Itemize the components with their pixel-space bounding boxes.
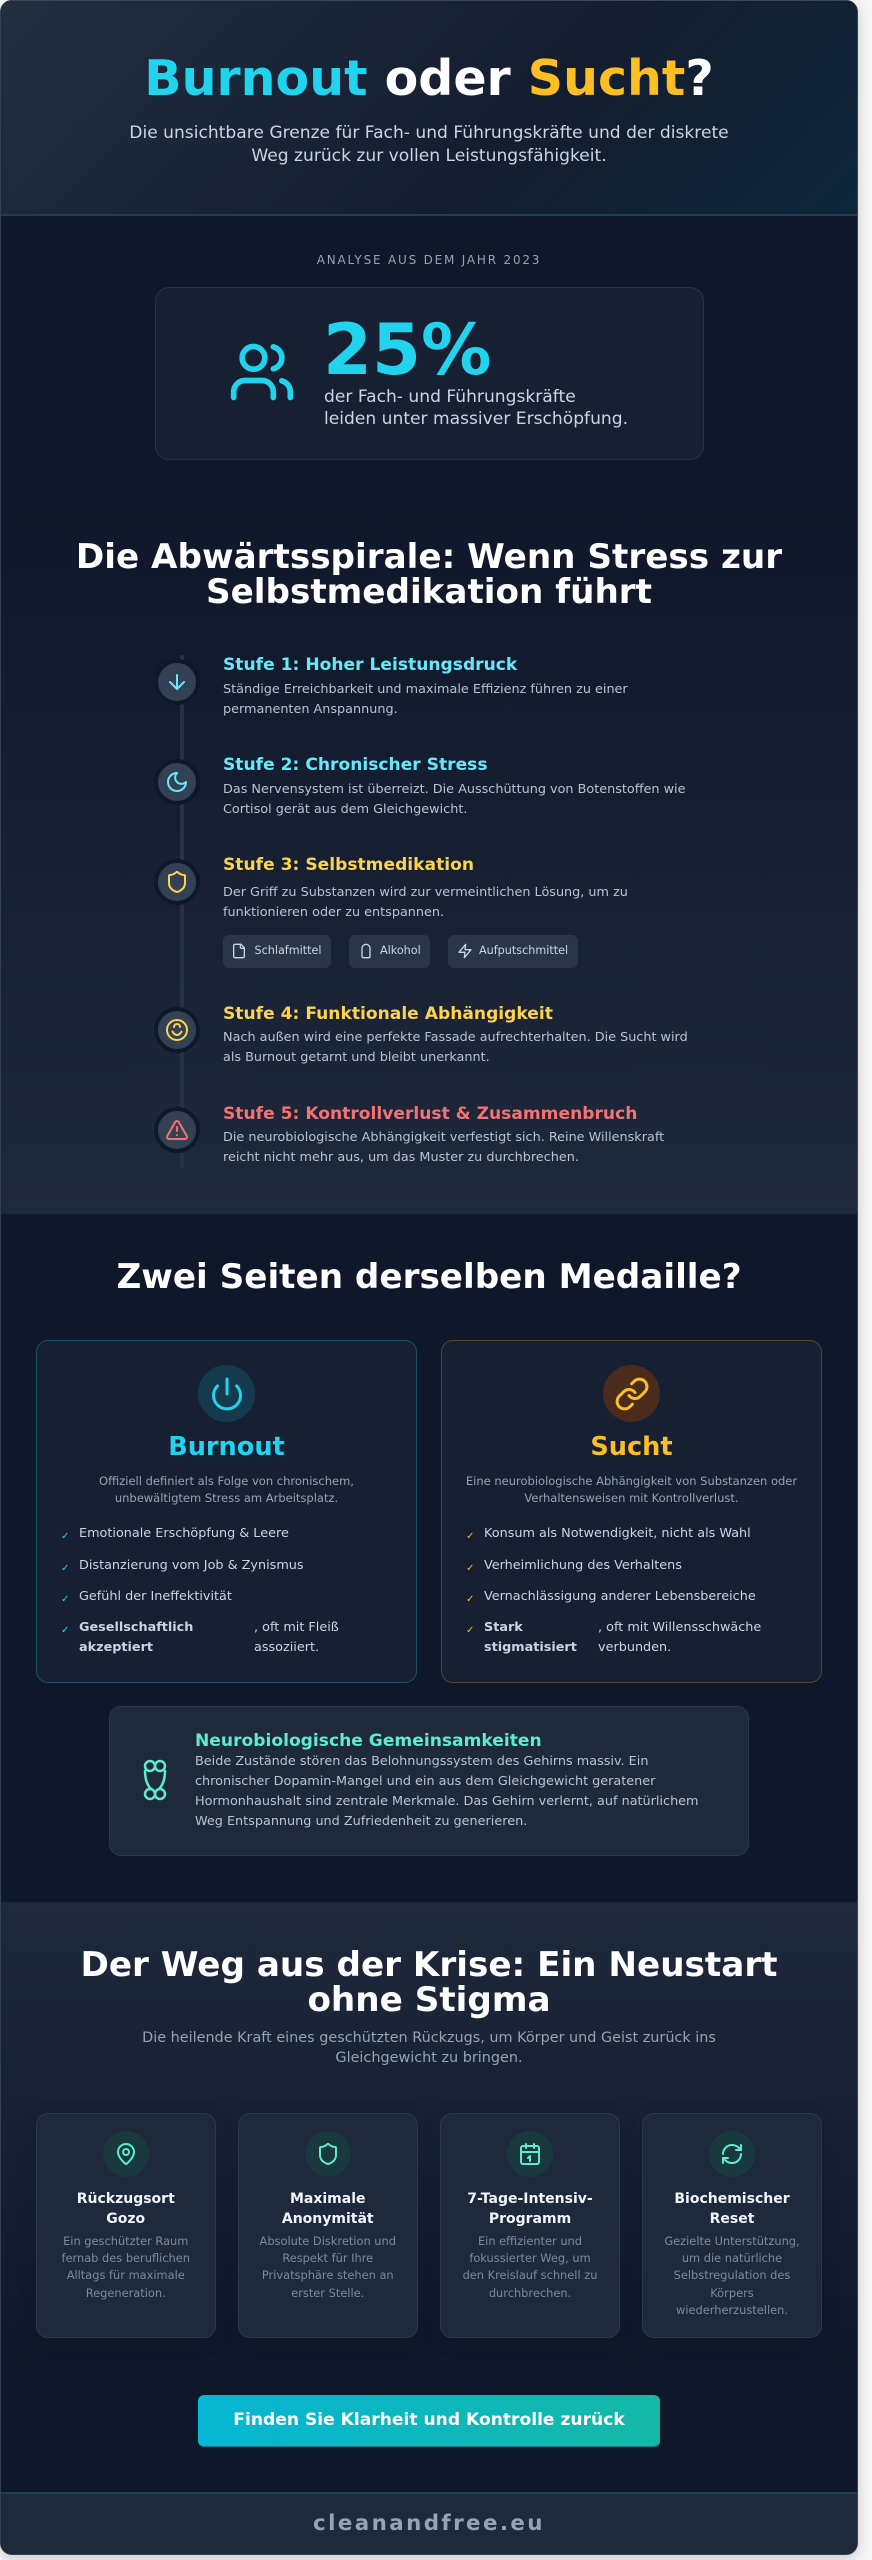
card title bbox=[674, 2191, 790, 2227]
icon: link bbox=[603, 1365, 660, 1422]
list item: , oft mit Fleiß bbox=[254, 1620, 339, 1635]
heading: Die Abwärtsspirale: Wenn Stress zur bbox=[76, 537, 782, 577]
icon: moon bbox=[154, 759, 200, 805]
list item: Stark bbox=[484, 1620, 523, 1635]
card: burnout: ✓ bbox=[61, 1531, 69, 1542]
card text: Ein effizienter und bbox=[478, 2234, 582, 2248]
card title: Anonymität bbox=[282, 2211, 374, 2227]
card title: Reset bbox=[710, 2211, 754, 2227]
icon: power bbox=[198, 1365, 255, 1422]
tag: alkohol: Alkohol bbox=[380, 944, 421, 957]
list item: Distanzierung vom Job & Zynismus bbox=[79, 1558, 304, 1573]
step text: Cortisol gerät aus dem Gleichgewicht. bbox=[223, 802, 467, 817]
subtitle: Weg zurück zur vollen Leistungsfähigkeit. bbox=[251, 146, 607, 166]
card text: den Kreislauf schnell zu bbox=[463, 2268, 597, 2282]
card title: Biochemischer bbox=[674, 2191, 790, 2207]
list item: Gefühl der Ineffektivität bbox=[79, 1589, 232, 1604]
step text bbox=[223, 1130, 664, 1165]
icon: warning bbox=[154, 1107, 200, 1153]
subheading bbox=[142, 2030, 716, 2066]
list item: Vernachlässigung anderer Lebensbereiche bbox=[484, 1589, 756, 1604]
step 4 bbox=[154, 1004, 688, 1065]
card: sucht: ✓ bbox=[466, 1625, 474, 1636]
icon: pin bbox=[103, 2131, 149, 2177]
card: sucht: ✓ bbox=[466, 1531, 474, 1542]
card: burnout: ✓ bbox=[61, 1625, 69, 1636]
panel: vergleich bbox=[1, 1214, 857, 1902]
card text: wiederherzustellen. bbox=[676, 2303, 788, 2317]
step 1 bbox=[158, 655, 628, 717]
heading: ohne Stigma bbox=[307, 1980, 551, 2020]
icon: brain bbox=[144, 1760, 166, 1800]
card title bbox=[77, 2191, 175, 2227]
callout text: chronischer Dopamin-Mangel und ein aus dem Gleichgewicht geratener bbox=[195, 1774, 655, 1789]
list item: akzeptiert bbox=[79, 1640, 153, 1655]
step 2 bbox=[158, 755, 685, 817]
card title: Maximale bbox=[290, 2191, 366, 2207]
heading: Der Weg aus der Krise: Ein Neustart bbox=[80, 1945, 778, 1985]
heading: Zwei Seiten derselben Medaille? bbox=[116, 1257, 742, 1297]
icon: users bbox=[230, 344, 294, 400]
step text bbox=[223, 782, 685, 817]
step text bbox=[223, 885, 628, 920]
card title: Sucht bbox=[590, 1432, 673, 1462]
card text: Gezielte Unterstützung, bbox=[664, 2234, 800, 2248]
panel: cta bbox=[1, 2372, 857, 2492]
step text bbox=[223, 1030, 688, 1065]
icon: refresh bbox=[709, 2131, 755, 2177]
list item: stigmatisiert bbox=[484, 1640, 577, 1655]
card text: um die natürliche bbox=[682, 2251, 782, 2265]
card text: fernab des beruflichen bbox=[61, 2251, 190, 2265]
list item: , oft mit Willensschwäche bbox=[598, 1620, 761, 1635]
timeline line bbox=[180, 655, 184, 1168]
card: sucht: ✓ bbox=[466, 1563, 474, 1574]
card title bbox=[282, 2191, 374, 2227]
card: sucht bbox=[441, 1340, 822, 1683]
card: reset bbox=[642, 2113, 822, 2338]
step title: Stufe 5: Kontrollverlust & Zusammenbruch bbox=[223, 1104, 637, 1124]
title: Burnout oder Sucht? bbox=[144, 50, 714, 107]
card text: Verhaltensweisen mit Kontrollverlust. bbox=[524, 1491, 739, 1505]
list item: Emotionale Erschöpfung & Leere bbox=[79, 1526, 289, 1541]
card text: Regeneration. bbox=[86, 2286, 166, 2300]
card text bbox=[466, 1474, 798, 1505]
card title: Programm bbox=[489, 2211, 571, 2227]
card text: Offiziell definiert als Folge von chronischem, bbox=[99, 1474, 354, 1488]
step text: Ständige Erreichbarkeit und maximale Effizienz führen zu einer bbox=[223, 682, 628, 697]
tag: aufputschmittel: Aufputschmittel bbox=[479, 944, 568, 957]
card title: 7-Tage-Intensiv- bbox=[467, 2191, 593, 2207]
callout: gemeinsamkeiten bbox=[109, 1706, 749, 1856]
card text: Alltags für maximale bbox=[67, 2268, 185, 2282]
card text: Selbstregulation des bbox=[674, 2268, 790, 2282]
step text: Nach außen wird eine perfekte Fassade aufrechterhalten. Die Sucht wird bbox=[223, 1030, 688, 1045]
heading bbox=[80, 1945, 778, 2020]
stat text: der Fach- und Führungskräfte bbox=[324, 387, 576, 407]
card: burnout: ✓ bbox=[61, 1563, 69, 1574]
list item: verbunden. bbox=[598, 1640, 671, 1655]
list item: Verheimlichung des Verhaltens bbox=[484, 1558, 682, 1573]
callout title: Neurobiologische Gemeinsamkeiten bbox=[195, 1731, 542, 1751]
card text: fokussierter Weg, um bbox=[469, 2251, 591, 2265]
card text bbox=[664, 2234, 800, 2317]
icon: shield bbox=[154, 859, 200, 905]
heading bbox=[76, 537, 782, 612]
card text: unbewältigtem Stress am Arbeitsplatz. bbox=[115, 1491, 338, 1505]
tag: schlafmittel bbox=[223, 935, 331, 968]
step 3 bbox=[154, 855, 628, 968]
step title: Stufe 4: Funktionale Abhängigkeit bbox=[223, 1004, 553, 1024]
stat text bbox=[324, 387, 628, 429]
card title bbox=[467, 2191, 593, 2227]
list item bbox=[61, 1620, 339, 1655]
card text bbox=[260, 2234, 396, 2300]
card: programm bbox=[440, 2113, 620, 2338]
card text: Respekt für Ihre bbox=[282, 2251, 373, 2265]
card text: Absolute Diskretion und bbox=[260, 2234, 396, 2248]
list item: Konsum als Notwendigkeit, nicht als Wahl bbox=[484, 1526, 751, 1541]
card title: Burnout bbox=[168, 1432, 285, 1462]
callout text bbox=[195, 1754, 699, 1829]
tag: schlafmittel: Schlafmittel bbox=[254, 944, 322, 957]
callout text: Beide Zustände stören das Belohnungssystem des Gehirns massiv. Ein bbox=[195, 1754, 648, 1769]
footer: cleanandfree.eu bbox=[313, 2511, 545, 2536]
icon: shield bbox=[305, 2131, 351, 2177]
step text: funktionieren oder zu entspannen. bbox=[223, 905, 444, 920]
step text bbox=[223, 682, 628, 717]
step title: Stufe 1: Hoher Leistungsdruck bbox=[223, 655, 517, 675]
card: burnout: ✓ bbox=[61, 1594, 69, 1605]
step title: Stufe 2: Chronischer Stress bbox=[223, 755, 488, 775]
step text: Der Griff zu Substanzen wird zur vermeintlichen Lösung, um zu bbox=[223, 885, 628, 900]
kicker: ANALYSE AUS DEM JAHR 2023 bbox=[317, 253, 541, 267]
panel: abwaertsspirale bbox=[1, 500, 857, 1214]
card text: durchbrechen. bbox=[489, 2286, 571, 2300]
subheading: Gleichgewicht zu bringen. bbox=[335, 2050, 523, 2066]
button: Finden Sie Klarheit und Kontrolle zurück bbox=[233, 2410, 625, 2430]
heading: Selbstmedikation führt bbox=[206, 572, 652, 612]
panel: statistik bbox=[1, 216, 857, 500]
step text: als Burnout getarnt und bleibt unerkannt. bbox=[223, 1050, 490, 1065]
icon: calendar bbox=[507, 2131, 553, 2177]
header bbox=[1, 0, 857, 216]
step text: permanenten Anspannung. bbox=[223, 702, 398, 717]
card: sucht: ✓ bbox=[466, 1594, 474, 1605]
tag: aufputschmittel bbox=[448, 935, 578, 968]
list item: Gesellschaftlich bbox=[79, 1620, 193, 1635]
stat card bbox=[155, 287, 704, 460]
button bbox=[198, 2395, 660, 2447]
panel: weg aus der krise bbox=[1, 1902, 857, 2372]
subheading: Die heilende Kraft eines geschützten Rückzugs, um Körper und Geist zurück ins bbox=[142, 2030, 716, 2046]
callout text: Hormonhaushalt sind zentrale Merkmale. Das Gehirn verlernt, auf natürlichem bbox=[195, 1794, 699, 1809]
card: anonymitaet bbox=[238, 2113, 418, 2338]
tag: alkohol bbox=[349, 935, 430, 968]
card text bbox=[99, 1474, 354, 1505]
step text: Das Nervensystem ist überreizt. Die Ausschüttung von Botenstoffen wie bbox=[223, 782, 685, 797]
icon: arrow down bbox=[154, 659, 200, 705]
card text: erster Stelle. bbox=[291, 2286, 364, 2300]
list item bbox=[466, 1620, 761, 1655]
list item: assoziiert. bbox=[254, 1640, 319, 1655]
card text: Eine neurobiologische Abhängigkeit von Substanzen oder bbox=[466, 1474, 797, 1488]
stat value: 25% bbox=[323, 309, 491, 391]
step 5 bbox=[154, 1104, 664, 1165]
step title: Stufe 3: Selbstmedikation bbox=[223, 855, 474, 875]
card title: Rückzugsort bbox=[77, 2191, 175, 2207]
card text bbox=[61, 2234, 190, 2300]
stat text: leiden unter massiver Erschöpfung. bbox=[324, 409, 628, 429]
card text: Körpers bbox=[710, 2286, 754, 2300]
step text: reicht nicht mehr aus, um das Muster zu durchbrechen. bbox=[223, 1150, 579, 1165]
card text: Privatsphäre stehen an bbox=[262, 2268, 394, 2282]
footer bbox=[1, 2492, 857, 2554]
callout text: Weg Entspannung und Zufriedenheit zu generieren. bbox=[195, 1814, 527, 1829]
card text: Ein geschützter Raum bbox=[63, 2234, 188, 2248]
subtitle: Die unsichtbare Grenze für Fach- und Führungskräfte und der diskrete bbox=[129, 123, 729, 143]
icon: smile bbox=[154, 1007, 200, 1053]
subtitle bbox=[129, 123, 729, 166]
card text bbox=[463, 2234, 597, 2300]
step text: Die neurobiologische Abhängigkeit verfestigt sich. Reine Willenskraft bbox=[223, 1130, 664, 1145]
card title: Gozo bbox=[106, 2211, 145, 2227]
card: gozo bbox=[36, 2113, 216, 2338]
card: burnout bbox=[36, 1340, 417, 1683]
